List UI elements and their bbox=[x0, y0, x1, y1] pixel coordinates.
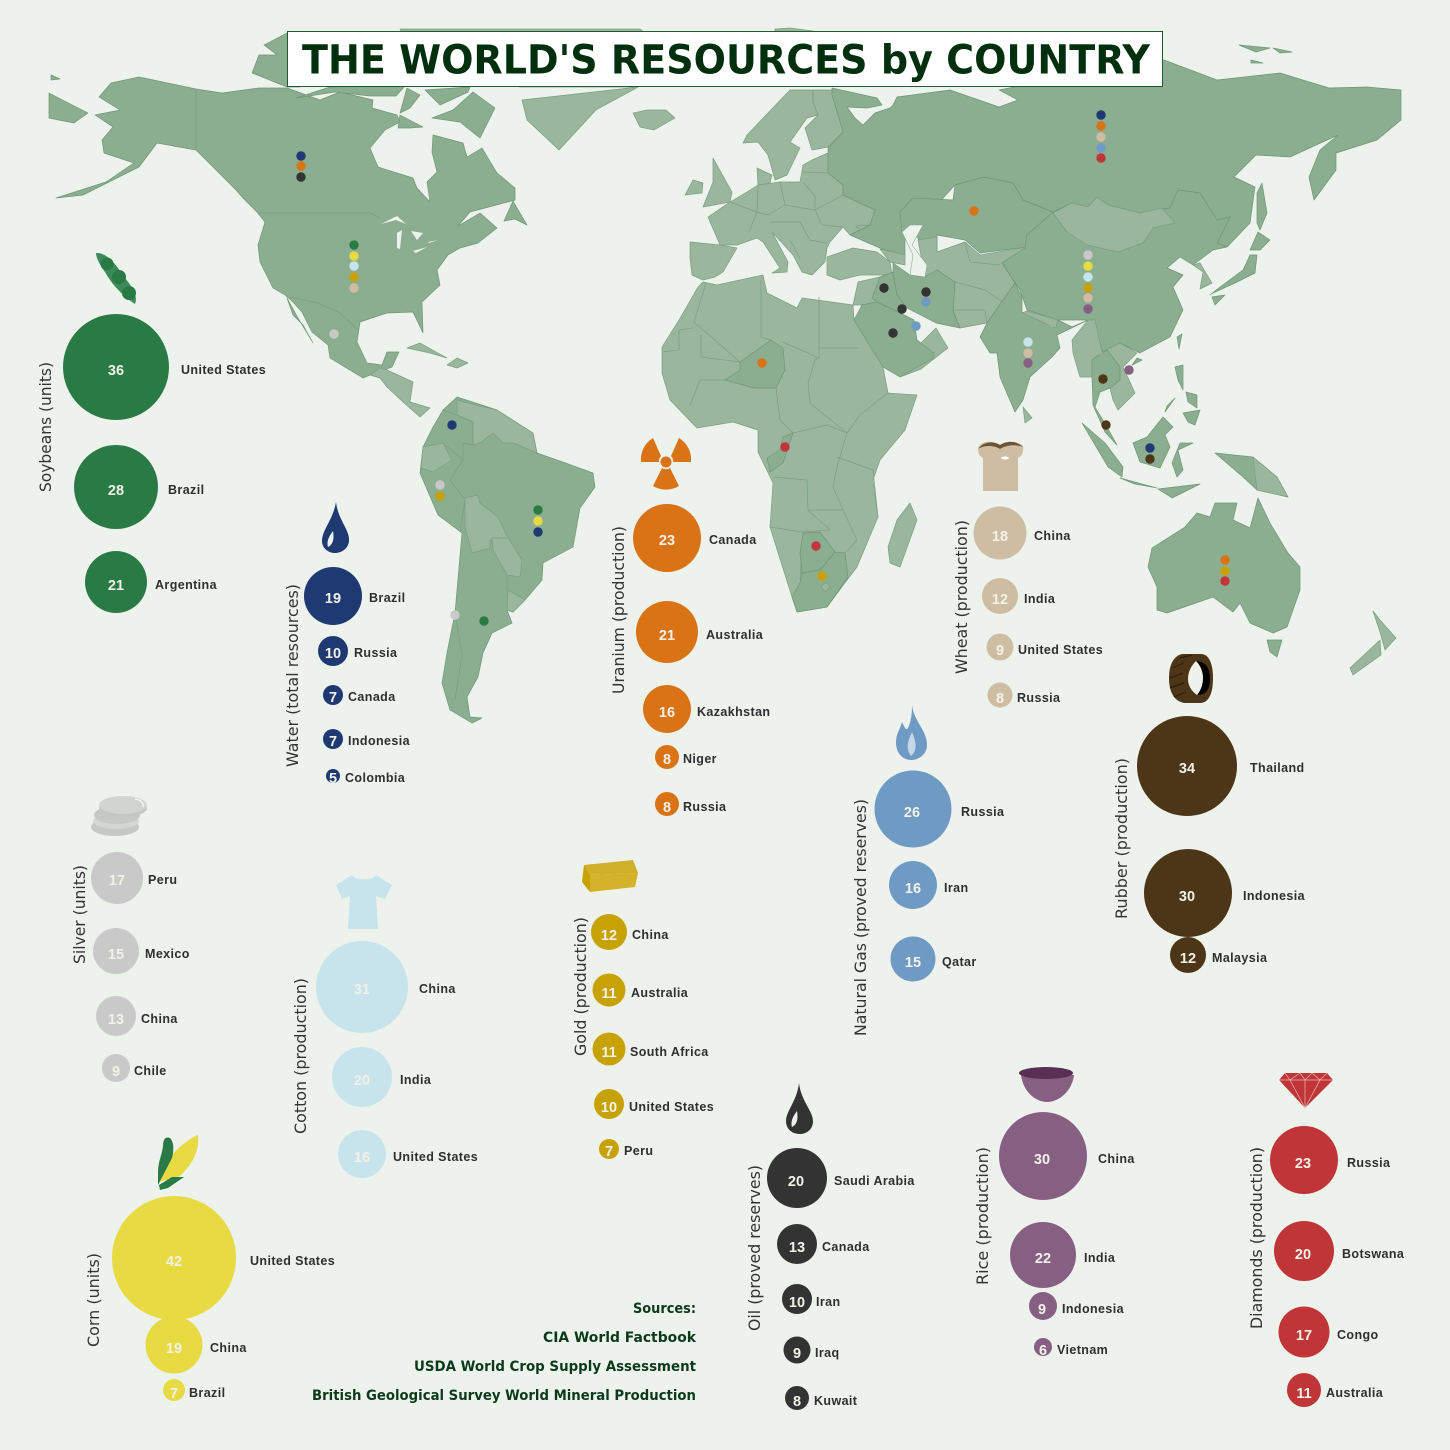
bubble: Canada 7: 7 bbox=[329, 690, 337, 706]
bubble: United States 16 bbox=[338, 1130, 478, 1178]
bubble: Russia 8 bbox=[988, 682, 1061, 708]
bubble: Qatar 15 bbox=[890, 936, 977, 982]
bubble: United States 36 bbox=[63, 314, 266, 420]
bubble: Australia 11 bbox=[1287, 1373, 1384, 1407]
icon: bread slice bbox=[978, 442, 1023, 491]
resource location markers bbox=[296, 110, 1230, 626]
bubble: United States 42: United States bbox=[250, 1254, 335, 1268]
bubble: Russia 10: Russia bbox=[354, 646, 398, 660]
bubble: Indonesia 9: 9 bbox=[1038, 1302, 1046, 1318]
bubble: Vietnam 6: Vietnam bbox=[1057, 1343, 1108, 1357]
land: japan bbox=[1210, 232, 1270, 305]
panel: corn bbox=[84, 1135, 335, 1402]
bubble: Canada 7: Canada bbox=[348, 690, 396, 704]
bubble: Iran 10: Iran bbox=[816, 1295, 841, 1309]
bubble: Niger 8 bbox=[655, 745, 717, 769]
land: china and mongolia bbox=[1002, 190, 1230, 353]
bubble: Colombia 5 bbox=[326, 769, 406, 787]
bubble: Iran 10 bbox=[782, 1284, 841, 1314]
bubble: Argentina 21 bbox=[85, 551, 218, 613]
panel: soybeans bbox=[36, 253, 266, 613]
land: middle east bbox=[853, 263, 960, 377]
bubble: India 20: 20 bbox=[354, 1073, 370, 1089]
heading: rubber: Rubber (production) bbox=[1112, 758, 1131, 919]
heading: corn: Corn (units) bbox=[84, 1253, 103, 1347]
heading: natural gas: Natural Gas (proved reserves) bbox=[851, 799, 870, 1036]
bubble: Qatar 15: Qatar bbox=[942, 955, 977, 969]
bubble: Vietnam 6: 6 bbox=[1039, 1343, 1047, 1359]
bubble: South Africa 11 bbox=[592, 1032, 709, 1066]
bubble: Peru 17: 17 bbox=[109, 873, 125, 889]
bubble: Saudi Arabia 20: 20 bbox=[788, 1174, 804, 1190]
bubble: Russia 8 bbox=[655, 792, 727, 816]
panel: gold bbox=[571, 860, 714, 1160]
icon: rice bowl bbox=[1019, 1067, 1074, 1102]
bubble: Mexico 15: 15 bbox=[108, 947, 124, 963]
land: north america bbox=[49, 33, 527, 378]
icon: oil drop bbox=[786, 1083, 813, 1134]
sources bbox=[312, 1301, 696, 1404]
bubble: Russia 10: 10 bbox=[325, 646, 341, 662]
bubble: Malaysia 12: Malaysia bbox=[1212, 951, 1268, 965]
bubble: United States 9: United States bbox=[1018, 643, 1103, 657]
bubble: Saudi Arabia 20 bbox=[767, 1148, 915, 1208]
bubble: Thailand 34: Thailand bbox=[1250, 761, 1305, 775]
bubble: Russia 8: Russia bbox=[1017, 691, 1061, 705]
bubble: Kuwait 8 bbox=[785, 1386, 858, 1410]
bubble: Australia 11: 11 bbox=[1296, 1386, 1312, 1402]
bubble: India 12 bbox=[982, 578, 1056, 614]
bubble: Iran 16: Iran bbox=[944, 881, 969, 895]
heading: diamonds: Diamonds (production) bbox=[1247, 1147, 1266, 1329]
bubble: Argentina 21: 21 bbox=[108, 578, 124, 594]
bubble: Brazil 19: Brazil bbox=[369, 591, 405, 605]
bubble: Colombia 5: 5 bbox=[329, 771, 337, 787]
panel: natural gas bbox=[851, 705, 1005, 1036]
land: korea bbox=[1193, 263, 1212, 289]
bubble: United States 9: 9 bbox=[996, 643, 1004, 659]
heading: rice: Rice (production) bbox=[973, 1147, 992, 1285]
bubble: Kazakhstan 16: 16 bbox=[659, 705, 675, 721]
bubble: Peru 7: 7 bbox=[605, 1144, 613, 1160]
bubble: Australia 21 bbox=[636, 601, 764, 663]
panel: wheat bbox=[952, 442, 1103, 708]
bubble: Canada 23: 23 bbox=[659, 533, 675, 549]
bubble: China 18 bbox=[974, 506, 1071, 560]
bubble: Malaysia 12 bbox=[1170, 937, 1268, 973]
bubble: Argentina 21: Argentina bbox=[155, 578, 218, 592]
bubble: Brazil 7: 7 bbox=[170, 1386, 178, 1402]
icon: flame bbox=[896, 705, 927, 760]
bubble: China 31: 31 bbox=[354, 982, 370, 998]
sources: British Geological Survey World Mineral Production bbox=[312, 1388, 696, 1404]
bubble: Indonesia 30: Indonesia bbox=[1243, 889, 1306, 903]
land: india bbox=[980, 283, 1088, 423]
bubble: Russia 26: 26 bbox=[904, 805, 920, 821]
bubble: China 31: China bbox=[419, 982, 456, 996]
land: australia and new zealand bbox=[1148, 498, 1396, 675]
heading: soybeans: Soybeans (units) bbox=[36, 362, 55, 492]
bubble: Brazil 28 bbox=[74, 445, 204, 529]
bubble: Iraq 9 bbox=[784, 1336, 840, 1364]
bubble: Australia 11: 11 bbox=[601, 986, 617, 1002]
bubble: India 20: India bbox=[400, 1073, 432, 1087]
icon: coin stack bbox=[91, 796, 147, 836]
bubble: Saudi Arabia 20: Saudi Arabia bbox=[834, 1174, 915, 1188]
bubble: Canada 23 bbox=[633, 504, 757, 572]
panel: diamonds bbox=[1247, 1073, 1405, 1407]
bubble: Colombia 5: Colombia bbox=[345, 771, 406, 785]
bubble: Indonesia 30 bbox=[1144, 849, 1306, 937]
bubble: Iran 16 bbox=[889, 861, 969, 909]
bubble: Brazil 19 bbox=[304, 567, 405, 625]
bubble: Thailand 34 bbox=[1137, 716, 1305, 816]
bubble: China 30 bbox=[999, 1112, 1135, 1200]
bubble: Russia 10 bbox=[318, 636, 398, 666]
heading: oil: Oil (proved reserves) bbox=[745, 1165, 764, 1331]
bubble: Botswana 20 bbox=[1274, 1221, 1405, 1281]
land: central america and caribbean bbox=[370, 343, 468, 417]
bubble: Chile 9: Chile bbox=[134, 1064, 167, 1078]
bubble: Brazil 7: Brazil bbox=[189, 1386, 225, 1400]
panel: uranium bbox=[609, 438, 770, 816]
bubble: Iraq 9: 9 bbox=[793, 1346, 801, 1362]
bubble: Russia 23: 23 bbox=[1295, 1156, 1311, 1172]
bubble: United States 42: 42 bbox=[166, 1254, 182, 1270]
bubble: China 12 bbox=[591, 914, 669, 950]
bubble: United States 42 bbox=[112, 1196, 335, 1320]
bubble: Kazakhstan 16: Kazakhstan bbox=[697, 705, 770, 719]
bubble: Kuwait 8: Kuwait bbox=[814, 1394, 858, 1408]
bubble: Canada 13: Canada bbox=[822, 1240, 870, 1254]
bubble: China 31 bbox=[316, 941, 456, 1033]
bubble: Russia 23: Russia bbox=[1347, 1156, 1391, 1170]
bubble: Russia 26: Russia bbox=[961, 805, 1005, 819]
bubble: Niger 8: Niger bbox=[683, 752, 717, 766]
sources: USDA World Crop Supply Assessment bbox=[414, 1359, 696, 1375]
bubble: China 12: 12 bbox=[601, 928, 617, 944]
icon: corn cob bbox=[158, 1135, 198, 1190]
bubble: Congo 17 bbox=[1278, 1306, 1379, 1358]
bubble: Indonesia 30: 30 bbox=[1179, 889, 1195, 905]
land: southeast asia bbox=[1072, 320, 1288, 498]
bubble: Indonesia 9: Indonesia bbox=[1062, 1302, 1125, 1316]
bubble: China 13 bbox=[96, 996, 178, 1036]
bubble: Peru 7 bbox=[599, 1139, 653, 1160]
bubble: Indonesia 7: 7 bbox=[329, 734, 337, 750]
bubble: China 13: 13 bbox=[108, 1012, 124, 1028]
bubble: Canada 23: Canada bbox=[709, 533, 757, 547]
bubble: Mexico 15: Mexico bbox=[145, 947, 190, 961]
panel: oil bbox=[745, 1083, 915, 1410]
bubble: Russia 8: 8 bbox=[663, 800, 671, 816]
bubble: United States 9 bbox=[986, 634, 1103, 660]
bubble: Qatar 15: 15 bbox=[905, 955, 921, 971]
bubble: India 22: 22 bbox=[1035, 1251, 1051, 1267]
bubble: Botswana 20: 20 bbox=[1295, 1247, 1311, 1263]
icon: tyre bbox=[1169, 654, 1213, 703]
land: africa bbox=[662, 275, 917, 612]
icon: soybean pod bbox=[96, 253, 136, 304]
bubble: Brazil 7 bbox=[163, 1379, 225, 1402]
bubble: Malaysia 12: 12 bbox=[1180, 951, 1196, 967]
bubble: United States 10: United States bbox=[629, 1100, 714, 1114]
panel: rice bbox=[973, 1067, 1135, 1359]
bubble: China 19 bbox=[146, 1316, 247, 1374]
bubble: India 12: India bbox=[1024, 592, 1056, 606]
bubble: Iran 16: 16 bbox=[905, 881, 921, 897]
panel: water bbox=[283, 502, 411, 787]
land: central asia bbox=[880, 237, 1027, 328]
bubble: China 19: China bbox=[210, 1341, 247, 1355]
bubble: Russia 26 bbox=[874, 770, 1005, 848]
heading: wheat: Wheat (production) bbox=[952, 520, 971, 674]
heading: uranium: Uranium (production) bbox=[609, 526, 628, 694]
bubble: United States 10: 10 bbox=[601, 1100, 617, 1116]
land: greenland and iceland bbox=[400, 28, 820, 150]
bubble: Iran 10: 10 bbox=[789, 1295, 805, 1311]
panel: silver bbox=[70, 796, 190, 1082]
bubble: Brazil 19: 19 bbox=[325, 591, 341, 607]
bubble: United States 36: 36 bbox=[108, 363, 124, 379]
bubble: China 13: China bbox=[141, 1012, 178, 1026]
icon: t-shirt bbox=[336, 875, 392, 929]
bubble: Kuwait 8: 8 bbox=[793, 1394, 801, 1410]
bubble: Indonesia 7: Indonesia bbox=[348, 734, 411, 748]
bubble: Mexico 15 bbox=[93, 928, 190, 974]
bubble: Niger 8: 8 bbox=[663, 752, 671, 768]
title: THE WORLD'S RESOURCES by COUNTRY bbox=[302, 38, 1151, 84]
icon: gold bar bbox=[582, 860, 638, 892]
bubble: Brazil 28: Brazil bbox=[168, 483, 204, 497]
bubble: India 20 bbox=[332, 1047, 432, 1107]
heading: gold: Gold (production) bbox=[571, 917, 590, 1056]
icon: radiation symbol bbox=[641, 438, 691, 490]
bubble: United States 36: United States bbox=[181, 363, 266, 377]
bubble: Australia 11 bbox=[592, 974, 689, 1006]
bubble: China 30: China bbox=[1098, 1152, 1135, 1166]
bubble: Australia 11: Australia bbox=[631, 986, 689, 1000]
bubble: Australia 11: Australia bbox=[1326, 1386, 1384, 1400]
bubble: Peru 17: Peru bbox=[148, 873, 177, 887]
bubble: India 22 bbox=[1010, 1222, 1116, 1288]
bubble: Australia 21: Australia bbox=[706, 628, 764, 642]
bubble: Russia 8: Russia bbox=[683, 800, 727, 814]
bubble: Chile 9: 9 bbox=[112, 1064, 120, 1080]
heading: silver: Silver (units) bbox=[70, 865, 89, 964]
bubble: Indonesia 9 bbox=[1029, 1292, 1125, 1320]
land: russia bbox=[828, 45, 1401, 256]
bubble: Kazakhstan 16 bbox=[643, 685, 770, 733]
bubble: Canada 7 bbox=[323, 685, 396, 706]
bubble: Peru 17 bbox=[91, 852, 177, 904]
bubble: India 22: India bbox=[1084, 1251, 1116, 1265]
heading: cotton: Cotton (production) bbox=[291, 978, 310, 1134]
bubble: Iraq 9: Iraq bbox=[815, 1346, 840, 1360]
bubble: Botswana 20: Botswana bbox=[1342, 1247, 1405, 1261]
heading: water: Water (total resources) bbox=[283, 584, 302, 767]
bubble: United States 10 bbox=[594, 1089, 714, 1119]
sources: CIA World Factbook bbox=[543, 1330, 696, 1346]
bubble: China 19: 19 bbox=[166, 1341, 182, 1357]
bubble: Congo 17: 17 bbox=[1296, 1328, 1312, 1344]
land: europe bbox=[685, 90, 892, 280]
land: caspian sea bbox=[902, 225, 927, 277]
world map bbox=[49, 28, 1401, 723]
bubble: United States 16: 16 bbox=[354, 1150, 370, 1166]
bubble: Vietnam 6 bbox=[1034, 1338, 1108, 1359]
land: south america bbox=[420, 397, 595, 723]
bubble: China 18: China bbox=[1034, 529, 1071, 543]
bubble: United States 16: United States bbox=[393, 1150, 478, 1164]
bubble: Russia 23 bbox=[1270, 1126, 1391, 1194]
bubble: Canada 13 bbox=[777, 1224, 870, 1264]
bubble: South Africa 11: South Africa bbox=[630, 1045, 709, 1059]
bubble: Congo 17: Congo bbox=[1337, 1328, 1379, 1342]
bubble: Brazil 28: 28 bbox=[108, 483, 124, 499]
bubble: Indonesia 7 bbox=[323, 729, 411, 750]
bubble: China 18: 18 bbox=[992, 529, 1008, 545]
bubble: Thailand 34: 34 bbox=[1179, 761, 1195, 777]
bubble: China 12: China bbox=[632, 928, 669, 942]
bubble: India 12: 12 bbox=[992, 592, 1008, 608]
icon: water drop bbox=[322, 502, 349, 553]
bubble: China 30: 30 bbox=[1034, 1152, 1050, 1168]
bubble: South Africa 11: 11 bbox=[601, 1045, 617, 1061]
land: kazakhstan bbox=[900, 177, 1053, 253]
bubble: Chile 9 bbox=[102, 1054, 167, 1082]
sources: Sources: bbox=[633, 1301, 696, 1317]
panel: rubber bbox=[1112, 654, 1306, 973]
bubble: Canada 13: 13 bbox=[789, 1240, 805, 1256]
icon: diamond bbox=[1279, 1073, 1333, 1108]
panel: cotton bbox=[291, 875, 478, 1178]
bubble: Russia 8: 8 bbox=[996, 691, 1004, 707]
bubble: Peru 7: Peru bbox=[624, 1144, 653, 1158]
bubble: Australia 21: 21 bbox=[659, 628, 675, 644]
